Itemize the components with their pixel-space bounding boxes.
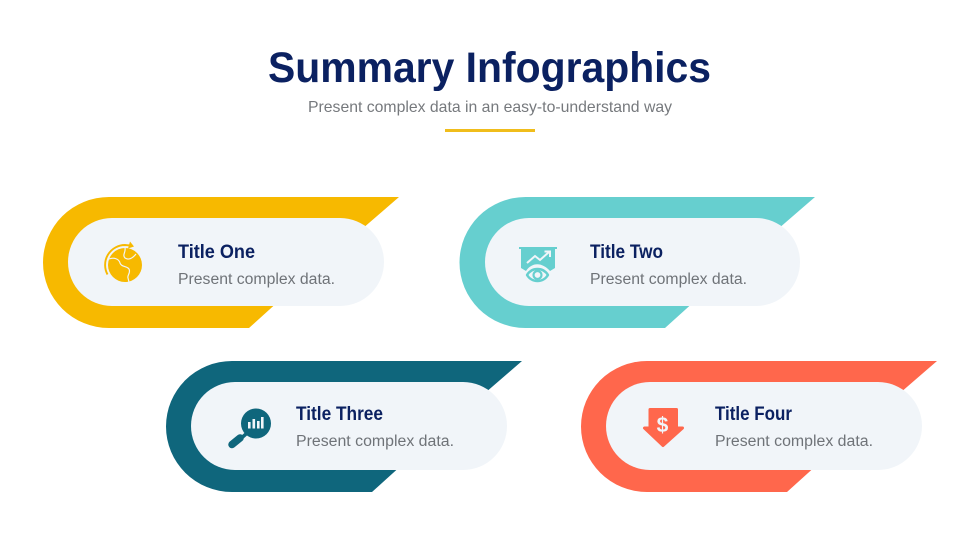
pill background — [485, 218, 800, 306]
yellow swoosh — [43, 197, 399, 328]
heading: title three: Title Three — [296, 404, 383, 425]
pill background — [68, 218, 384, 306]
pill background — [606, 382, 922, 470]
dollar sign: $ — [657, 414, 669, 437]
heading: title one: Title One — [178, 242, 255, 263]
pill background — [191, 382, 507, 470]
orange swoosh — [581, 361, 937, 492]
panel: title two — [460, 197, 815, 328]
subtitle: Present complex data in an easy-to-understand way — [308, 99, 672, 116]
text: description: Present complex data. — [715, 433, 873, 450]
dark teal swoosh — [166, 361, 522, 492]
title: Summary Infographics — [268, 44, 711, 92]
text: description: Present complex data. — [590, 271, 747, 288]
heading: title two: Title Two — [590, 242, 663, 263]
panel: title one — [43, 197, 399, 328]
title underline — [445, 129, 535, 132]
text: description: Present complex data. — [178, 271, 335, 288]
icon: down arrow with dollar — [644, 410, 682, 446]
icon: magnifier with bars — [232, 408, 271, 444]
panel: title four — [581, 361, 937, 492]
text: description: Present complex data. — [296, 433, 454, 450]
panel: title three — [166, 361, 522, 492]
icon: presentation board with eye — [519, 247, 557, 281]
heading: title four: Title Four — [715, 404, 793, 425]
icon: globe with arrow — [105, 242, 142, 282]
teal swoosh — [460, 197, 815, 328]
